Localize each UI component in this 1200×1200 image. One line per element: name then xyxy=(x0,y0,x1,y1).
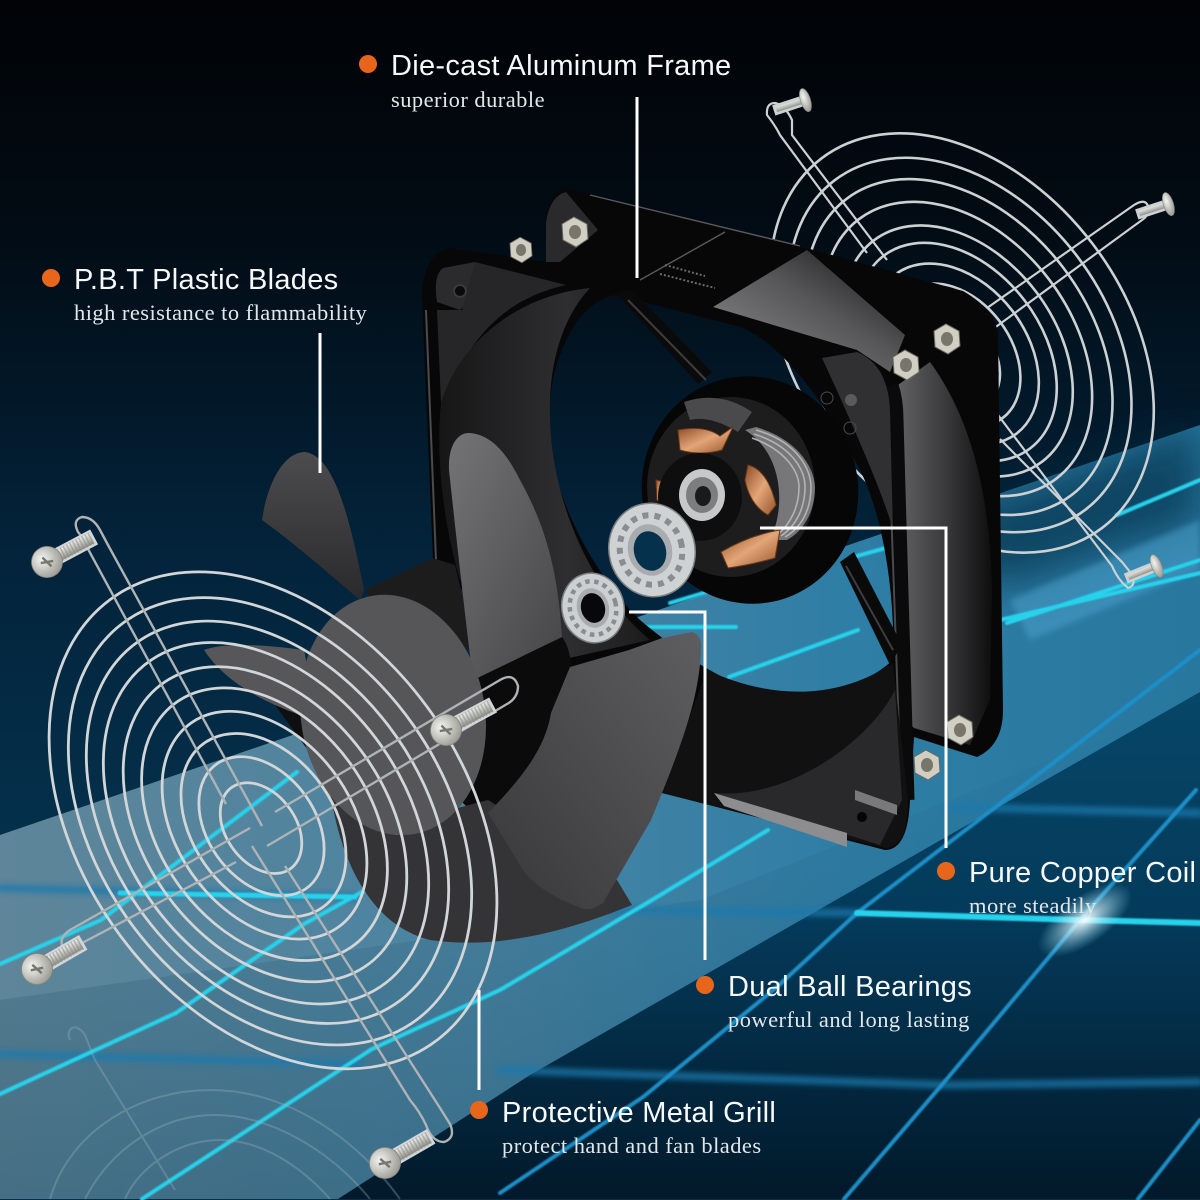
callout: Die-cast Aluminum Frame: superior durable xyxy=(391,87,545,112)
fan frame xyxy=(422,188,1003,850)
large ball bearing xyxy=(598,493,706,607)
callout: Die-cast Aluminum Frame xyxy=(359,50,732,112)
callout: P.B.T Plastic Blades: high resistance to flammability xyxy=(74,300,368,325)
callout: Dual Ball Bearings: Dual Ball Bearings xyxy=(728,971,972,1003)
callout: Dual Ball Bearings: powerful and long lasting xyxy=(728,1007,970,1032)
front left corner panel xyxy=(436,262,475,310)
motor with copper coil xyxy=(621,356,879,624)
callout: Pure Copper Coil xyxy=(937,857,1196,918)
callout: Pure Copper Coil: Pure Copper Coil xyxy=(969,857,1196,889)
left inner wall xyxy=(439,288,650,660)
callout: P.B.T Plastic Blades: P.B.T Plastic Blades xyxy=(74,264,338,296)
callout: P.B.T Plastic Blades xyxy=(42,264,368,325)
small ball bearing xyxy=(554,566,632,650)
right corner panel xyxy=(822,352,893,530)
copper windings xyxy=(656,427,780,568)
callout: Protective Metal Grill: protect hand and fan blades xyxy=(502,1133,762,1158)
neon floor grid lines xyxy=(0,480,1200,1199)
callout: Protective Metal Grill: Protective Metal Grill xyxy=(502,1097,776,1129)
leader lines xyxy=(320,97,946,1090)
frame top face details xyxy=(546,192,598,262)
struts xyxy=(616,290,902,665)
nuts xyxy=(510,217,973,780)
callout: Die-cast Aluminum Frame: Die-cast Aluminum Frame xyxy=(391,50,732,82)
faint grill reflection xyxy=(50,1027,400,1199)
rear metal grill xyxy=(691,59,1200,627)
lower inner wall xyxy=(662,663,908,848)
fan blades xyxy=(204,433,701,943)
callout: Dual Ball Bearings xyxy=(696,971,972,1032)
callout: Pure Copper Coil: more steadily xyxy=(969,893,1097,918)
front metal grill xyxy=(0,490,590,1184)
right inner wall xyxy=(898,362,992,745)
callout: Protective Metal Grill xyxy=(470,1097,776,1158)
